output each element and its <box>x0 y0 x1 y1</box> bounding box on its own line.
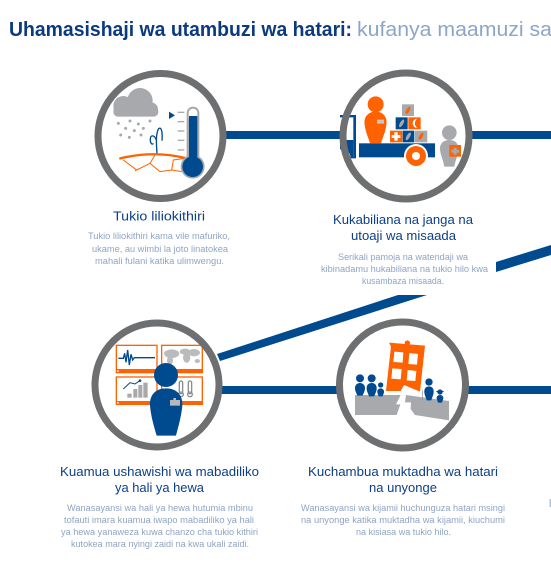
arrow: diagonal connector lower segment <box>217 295 427 361</box>
title: Uhamasishaji wa utambuzi wa hatari: <box>9 19 352 41</box>
text block: ya hewa yanaweza kuwa chanzo cha tukio kithiri <box>61 527 258 537</box>
text block <box>61 503 258 549</box>
heading <box>308 464 498 495</box>
heading: Kukabiliana na janga na <box>333 212 474 227</box>
text block: na kisiasa wa tukio hilo. <box>356 527 451 537</box>
clipped text fragment at right edge <box>550 499 551 507</box>
arrow: connector from attribution to context <box>216 386 338 394</box>
text block: mahali fulani katika ulimwengu. <box>95 256 224 266</box>
icon: cloud, rain, drought and thermometer <box>113 88 205 179</box>
text block: kutokea mara nyingi zaidi na kwa ukali zaidi. <box>71 539 249 549</box>
panel: extreme event <box>88 74 230 266</box>
heading: ya hali ya hewa <box>115 480 205 495</box>
heading <box>333 212 474 243</box>
panel: response and relief <box>321 73 488 286</box>
arrow: connector from response to next step <box>471 131 551 139</box>
text block <box>321 252 488 286</box>
icon: relief truck with boxes and people <box>340 96 461 168</box>
heading: Kuchambua muktadha wa hatari <box>308 464 498 479</box>
ring <box>98 74 223 198</box>
icon: scientist in front of data screens <box>116 345 202 436</box>
title <box>9 19 551 41</box>
text block <box>88 231 230 266</box>
arrow: connector from event to response <box>225 131 341 139</box>
text block: Serikali pamoja na watendaji wa <box>338 252 468 262</box>
heading: Kuamua ushawishi wa mabadiliko <box>60 464 259 479</box>
text block: ukame, au wimbi la joto linatokea <box>92 244 228 254</box>
arrow: diagonal connector upper segment <box>496 245 551 272</box>
text block: kusambaza misaada. <box>362 276 444 286</box>
text block: Wanasayansi wa kijamii huchunguza hatari msingi <box>301 503 505 513</box>
text block <box>301 503 505 537</box>
panel: hazard and vulnerability context <box>301 322 505 537</box>
heading: Tukio liliokithiri <box>113 208 205 224</box>
text block: na unyonge katika muktadha wa kijamii, kiuchumi <box>301 515 505 525</box>
panel: attribution <box>60 323 259 549</box>
ring <box>95 323 219 447</box>
arrow: connector from context to next step <box>467 386 551 394</box>
text block: Wanasayansi wa hali ya hewa hutumia mbinu <box>67 503 253 513</box>
text block: tofauti imara kuamua iwapo mabadiliko ya hali <box>64 515 254 525</box>
ring <box>343 73 469 199</box>
text block: kibinadamu hukabiliana na tukio hilo kwa <box>321 264 488 274</box>
text block: Tukio liliokithiri kama vile mafuriko, <box>88 231 230 241</box>
icon: tilted building, cracked ground and families <box>355 340 449 420</box>
heading: utoaji wa misaada <box>351 228 457 243</box>
title: kufanya maamuzi sa <box>357 19 551 41</box>
heading <box>60 464 259 495</box>
heading: na unyonge <box>369 480 437 495</box>
ring <box>340 322 466 448</box>
